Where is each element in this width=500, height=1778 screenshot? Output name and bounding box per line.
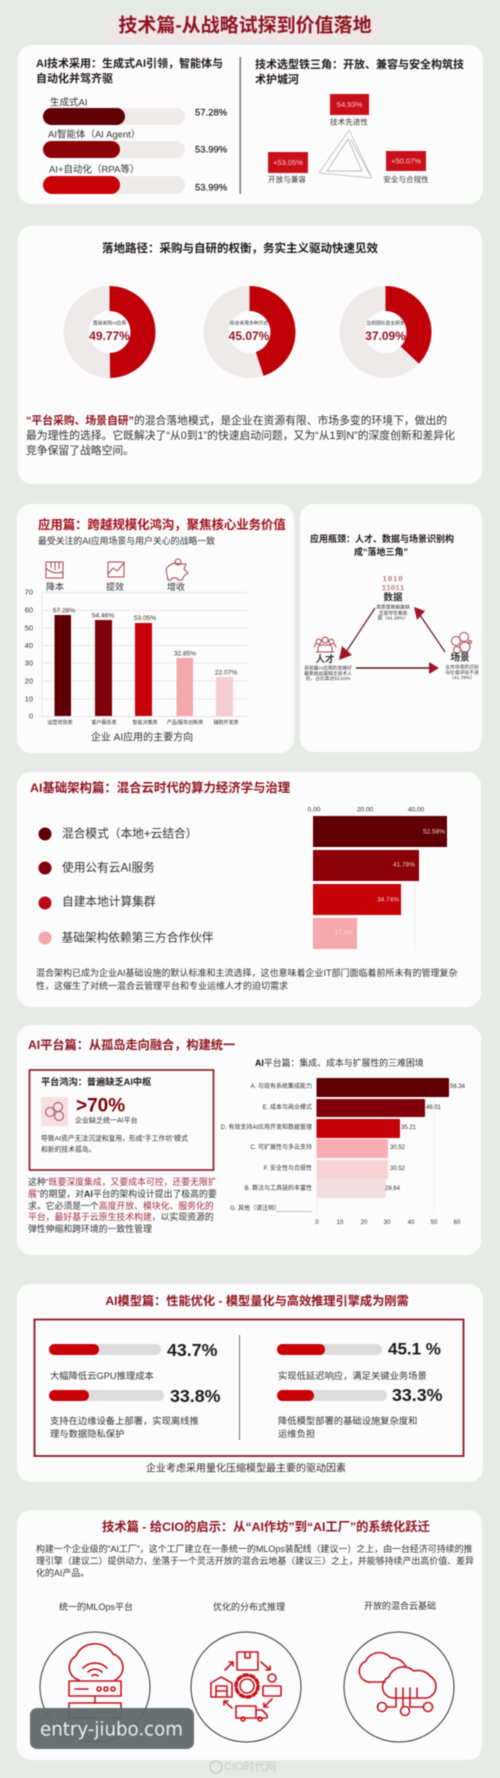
stat: GPU cost: 43.7% (167, 1340, 218, 1360)
triangle diagram: 技术先进性 (330, 116, 368, 126)
donut: combined modes (216, 298, 283, 366)
bar chart: 32.85% (174, 650, 196, 658)
bar chart: 54.46% (92, 612, 114, 620)
triangle diagram: +50.07% (391, 156, 421, 166)
donut: direct purchase (76, 298, 143, 366)
text block: 最为理性的选择。它既解决了“从0到1”的快速启动问题，又为“从1到N”的深度创新和差异化 (26, 428, 455, 442)
bar chart: 智能决策类 (132, 719, 158, 726)
horizontal bar chart: 17.3% (335, 930, 353, 936)
title (108, 14, 382, 42)
panel: AI infrastructure (17, 772, 481, 1007)
text block: 求。它必须是一个高度开放、模块化、服务化的 (28, 1200, 214, 1211)
node: data: 11011 (382, 585, 405, 593)
horizontal bar chart: B. 算法与工具链的丰富性 (245, 1184, 312, 1192)
icon: cost reduction (46, 562, 64, 592)
caption: 企业考虑采用量化压缩模型最主要的驱动因素 (146, 1462, 346, 1474)
legend: 自建本地计算集群 (62, 894, 156, 908)
heading: AI adoption: 自动化并驾齐驱 (36, 71, 113, 85)
horizontal bar chart: 35.21 (401, 1125, 417, 1131)
bar chart: 22.07% (215, 670, 237, 676)
heading: AI平台篇：从孤岛走向融合，构建统一 (28, 1037, 235, 1052)
bar chart: 辅助开发类 (213, 719, 239, 726)
horizontal bar chart: 40.00 (408, 806, 425, 814)
panel: application chart (17, 504, 294, 753)
node: scene: （41.78%） (449, 675, 475, 681)
horizontal bar chart: G. 其他（请注明） (230, 1204, 280, 1212)
column: distributed inference: 优化的分布式推理 (213, 1601, 285, 1612)
donut: self development: 37.09% (365, 329, 406, 343)
node: scene (445, 632, 479, 681)
legend: 混合模式（本地+云结合） (62, 826, 197, 840)
heading: 应用篇：跨越规模化鸿沟，聚焦核心业务价值 (38, 517, 286, 532)
column: hybrid cloud: 开放的混合云基础 (364, 1600, 436, 1611)
horizontal bar chart: 28.64 (385, 1186, 401, 1192)
chart heading: AI平台篇：集成、成本与扩展性的三难困境 (255, 1057, 424, 1068)
panel: CIO advice (17, 1510, 482, 1760)
horizontal bar chart: 56.34 (450, 1084, 466, 1090)
watermark: site badge: entry-jiubo.com (40, 1720, 183, 1740)
heading: 成“落地三角” (354, 546, 408, 557)
stat: complexity (277, 1385, 443, 1439)
bar chart: 10 (25, 694, 33, 704)
column: MLOps platform (40, 1601, 150, 1742)
node: data: 题（41.39%） (378, 616, 408, 622)
stat: edge deployment (49, 1386, 221, 1439)
stat: latency: 45.1 % (388, 1340, 441, 1358)
bar: AI agent: 53.99% (195, 144, 228, 156)
stat: GPU cost: 大幅降低云GPU推理成本 (50, 1370, 154, 1381)
horizontal bar chart: D. 有效支持AI应用开发和数据管理 (221, 1123, 312, 1131)
horizontal bar chart: A. 与现有系统集成能力 (251, 1082, 312, 1090)
horizontal bar chart: F. 安全性与合规性 (264, 1164, 312, 1172)
horizontal bar chart: C. 可扩展性与多云支持 (250, 1143, 312, 1151)
heading: AI adoption (36, 56, 223, 85)
bar: generative AI: 57.28% (195, 108, 228, 118)
stat: edge deployment: 33.8% (170, 1386, 221, 1406)
text block (36, 1543, 474, 1578)
icon: clouds and circuit (359, 1653, 436, 1716)
bar chart: 70 (25, 588, 33, 596)
heading: AI模型篇：性能优化 - 模型量化与高效推理引擎成为刚需 (105, 1293, 409, 1308)
node: data: 1010 (382, 576, 404, 584)
text block: 展”的期望，对AI平台的架构设计提出了极高的要 (28, 1188, 217, 1199)
node: scene: 与价值评估不清 (445, 669, 479, 676)
text block: 弹性伸缩和跨环境的一致性管理 (28, 1223, 152, 1234)
horizontal bar chart: 30.52 (390, 1166, 406, 1172)
horizontal bar chart: 60 (454, 1220, 461, 1226)
text block: 化的AI产品。 (36, 1567, 89, 1578)
column: MLOps platform: 统一的MLOps平台 (59, 1601, 133, 1612)
bar chart: 50 (25, 624, 33, 632)
icon: efficiency: 提效 (106, 581, 124, 592)
arrow: data to talent (339, 608, 375, 660)
node: talent (304, 637, 352, 682)
icon: cost reduction: 降本 (46, 581, 64, 592)
horizontal bar chart: 20 (361, 1220, 368, 1226)
bar chart: 57.28% (53, 608, 75, 614)
triangle diagram: 安全与合规性 (383, 174, 429, 184)
column: distributed inference (191, 1601, 301, 1742)
icon: efficiency (106, 562, 124, 592)
bar chart: 产品/服务创新类 (167, 719, 203, 726)
bar chart: 0 (29, 712, 33, 720)
triangle diagram: +53.05% (273, 158, 303, 167)
text block: 理引擎（建议二）提供动力，坐落于一个灵活开放的混合云地基（建议三）之上，并能够持续产出高价值、差异 (36, 1555, 474, 1566)
text block (28, 1176, 217, 1234)
callout: platform gap: 和新的技术孤岛。 (41, 1144, 95, 1154)
text block: 这种“既要深度集成，又要成本可控，还要无限扩 (28, 1176, 217, 1187)
triangle diagram: 54.93% (337, 100, 363, 109)
stat: latency: 实现低延迟响应，满足关键业务场景 (278, 1370, 427, 1381)
horizontal bar chart: 41.78% (393, 862, 415, 868)
bar: AI agent: AI智能体（AI Agent） (48, 128, 140, 140)
node: scene: 场景 (450, 652, 470, 664)
horizontal bar chart (308, 806, 447, 950)
horizontal bar chart: 0.00 (308, 806, 321, 814)
donut: self development: 当前团队自主研发 (366, 320, 405, 326)
stat: edge deployment: 支持在边缘设备上部署，实现离线推 (50, 1415, 199, 1426)
heading: 落地路径：采购与自研的权衡，务实主义驱动快速见效 (102, 241, 378, 255)
donut: direct purchase: 49.77% (89, 329, 130, 343)
bar: generative AI (43, 96, 228, 125)
bar: AI plus automation: 53.99% (195, 182, 228, 194)
horizontal bar chart: 46.01 (426, 1105, 442, 1111)
heading: iron triangle: 技术选型铁三角：开放、兼容与安全构筑技 (255, 57, 464, 71)
callout: platform gap: 平台鸿沟：普遍缺乏AI中枢 (41, 1076, 151, 1087)
legend (38, 826, 214, 944)
watermark: weibo source: CIO时代网 (224, 1760, 277, 1773)
callout: platform gap: >70% (76, 1096, 125, 1116)
text block (36, 967, 458, 991)
watermark: site badge (30, 1708, 194, 1749)
horizontal bar chart (221, 1075, 466, 1226)
heading (310, 533, 454, 557)
heading: iron triangle (255, 57, 464, 86)
donut: combined modes: 45.07% (229, 329, 270, 343)
bar chart (25, 588, 247, 726)
node: scene: 业务场景的识别 (445, 664, 479, 670)
stat: complexity: 降低模型部署的基础设施复杂度和 (278, 1415, 417, 1426)
heading: AI基础架构篇：混合云时代的算力经济学与治理 (30, 780, 291, 795)
stat: latency (277, 1340, 441, 1381)
subtitle: 最受关注的AI应用场景与用户关心的战略一致 (38, 535, 215, 546)
horizontal bar chart: 20.00 (357, 806, 374, 814)
horizontal bar chart: 30.52 (390, 1145, 406, 1151)
text block: 竞争保留了战略空间。 (26, 443, 134, 457)
panel: application bottlenecks (300, 504, 482, 752)
chart caption: 企业 AI应用的主要方向 (91, 730, 193, 744)
text block: “平台采购、场景自研”的混合落地模式，是企业在资源有限、市场多变的环境下，做出的 (26, 413, 447, 427)
bar chart: 客户服务类 (91, 719, 117, 726)
stat: complexity: 33.3% (392, 1385, 443, 1405)
text block: 性，这催生了对统一混合云管理平台和专业运维人才的迫切需求 (36, 980, 288, 991)
callout: platform gap: 企业缺乏统一AI平台 (75, 1116, 138, 1124)
horizontal bar chart: 40 (408, 1220, 415, 1226)
stat: complexity: 运维负担 (278, 1428, 315, 1439)
bar chart: 40 (25, 641, 33, 650)
bar: AI agent (43, 128, 228, 158)
bar chart: 20 (25, 676, 33, 686)
legend: 基础架构依赖第三方合作伙伴 (62, 930, 214, 944)
bar: AI plus automation: AI+自动化（RPA等） (49, 164, 139, 176)
horizontal bar chart: 10 (337, 1220, 344, 1226)
donut: direct purchase: 直接采购AI应用 (93, 320, 126, 326)
horizontal bar chart: 30 (384, 1220, 391, 1226)
node: data: 数据 (383, 592, 403, 604)
donut: combined modes: 综合采用多种方式 (230, 320, 268, 326)
heading: 应用瓶颈：人才、数据与场景识别构 (310, 533, 454, 544)
panel: landing path (18, 226, 482, 484)
column: hybrid cloud (344, 1600, 454, 1742)
node: data: 乏是存在差距 (379, 610, 408, 616)
text block: 混合架构已成为企业AI基础设施的默认标准和主流选择，这也意味着企业IT部门面临着前所未有的管理复杂 (36, 967, 458, 978)
stat: GPU cost (49, 1340, 218, 1381)
text block: 构建一个企业级的“AI工厂”，这个工厂建立在一条统一的MLOps装配线（建议一）之上，由一台经济可持续的推 (36, 1543, 473, 1554)
text block: 平台，最好基于云原生技术构建，以实现资源的 (28, 1211, 214, 1222)
node: data: 高质量数据集缺 (376, 604, 410, 610)
heading: AI adoption: AI技术采用：生成式AI引领，智能体与 (36, 56, 223, 70)
bar: generative AI: 生成式AI (50, 96, 87, 108)
panel: technology adoption and iron triangle (18, 45, 483, 204)
text block (26, 413, 455, 457)
horizontal bar chart: 34.74% (377, 896, 399, 904)
horizontal bar chart: E. 成本与商业模式 (263, 1103, 312, 1111)
triangle diagram: 开放与兼容 (268, 174, 306, 184)
panel: AI platform (17, 1025, 481, 1255)
heading: 技术篇 - 给CIO的启示：从“AI作坊”到“AI工厂”的系统化跃迁 (102, 1519, 430, 1534)
icon: inference cycle (211, 1652, 281, 1721)
donut: self development (352, 298, 419, 366)
bar chart: 53.05% (134, 615, 156, 622)
bar chart: 运营增效类 (47, 719, 73, 726)
icon: linked circles (41, 1097, 68, 1126)
bar chart: 60 (25, 606, 33, 614)
icon: piggy bank (166, 559, 188, 592)
stat: edge deployment: 理与数据隐私保护 (50, 1428, 124, 1439)
arrow: scene to data (414, 607, 445, 652)
bar: AI plus automation (43, 164, 228, 194)
node: talent: 最要挑战是缺乏技术人 (304, 670, 352, 677)
title: 技术篇-从战略试探到价值落地 (118, 14, 372, 36)
horizontal bar chart: 50 (431, 1220, 438, 1226)
panel: AI model (17, 1284, 483, 1482)
node: talent: 人才 (315, 654, 335, 666)
horizontal bar chart: 52.58% (423, 828, 445, 836)
node: data (376, 576, 410, 622)
icon: cloud server (69, 1644, 123, 1718)
legend: 使用公有云AI服务 (62, 860, 155, 874)
horizontal bar chart: 0 (315, 1220, 319, 1226)
callout: platform gap: 导致AI资产无法沉淀和复用，形成“手工作坊”模式 (41, 1134, 188, 1142)
callout: platform gap (30, 1070, 214, 1170)
icon: piggy bank: 增收 (167, 581, 185, 592)
heading: iron triangle: 术护城河 (255, 72, 299, 86)
triangle diagram (268, 94, 429, 184)
node: talent: 员，占比高达53.53% (305, 675, 351, 682)
framed statistics (34, 1320, 464, 1456)
bar chart: 30 (25, 658, 33, 668)
node: talent: 目前最AI应用的发展好 (304, 664, 352, 672)
arrow: talent to scene (356, 662, 439, 674)
